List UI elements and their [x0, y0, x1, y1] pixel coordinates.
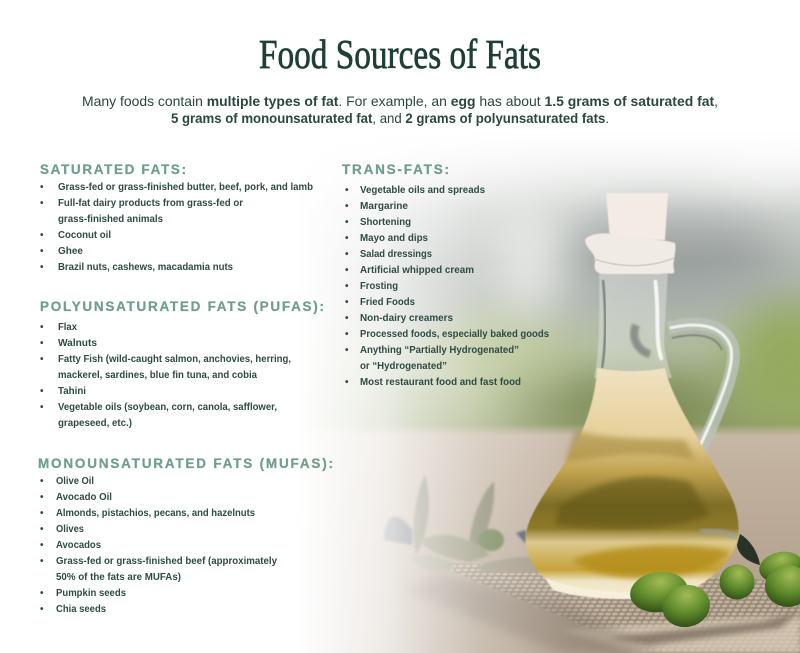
panel: saturated fats [40, 162, 313, 273]
olive sprig [384, 475, 540, 572]
intro text [82, 93, 718, 126]
list: trans-fats: • [345, 249, 349, 260]
dark leaf behind bottle [737, 534, 760, 565]
list: polyunsaturated fats: grapeseed, etc.) [58, 418, 132, 429]
list: trans-fats [345, 185, 549, 388]
cork [606, 193, 668, 240]
list: polyunsaturated fats: • [40, 354, 44, 365]
glass neck [594, 270, 672, 378]
list: monounsaturated fats: Pumpkin seeds [56, 588, 126, 599]
list: trans-fats: • [345, 377, 349, 388]
heading: polyunsaturated fats: POLYUNSATURATED FATS (PUFAS): [40, 299, 324, 314]
refraction and glints in oil [555, 477, 710, 529]
list: monounsaturated fats: • [40, 508, 44, 519]
list: saturated fats: • [40, 198, 44, 209]
list: trans-fats: • [345, 185, 349, 196]
list: monounsaturated fats: • [40, 604, 44, 615]
list: trans-fats: or “Hydrogenated” [360, 361, 447, 372]
list: saturated fats: • [40, 246, 44, 257]
panel: monounsaturated fats [38, 456, 333, 615]
list: trans-fats: Shortening [360, 217, 411, 228]
list: trans-fats: Margarine [360, 201, 408, 212]
heading: saturated fats: SATURATED FATS: [40, 162, 186, 177]
list: monounsaturated fats [40, 476, 277, 615]
list: saturated fats: Ghee [58, 246, 83, 257]
list: monounsaturated fats: • [40, 524, 44, 535]
list: saturated fats: Coconut oil [58, 230, 111, 241]
bottle rim [585, 233, 675, 274]
list: trans-fats: • [345, 233, 349, 244]
list: polyunsaturated fats: • [40, 322, 44, 333]
list: trans-fats: Most restaurant food and fast food [360, 377, 521, 388]
list: monounsaturated fats: Olives [56, 524, 84, 535]
list: saturated fats [40, 182, 313, 273]
list: polyunsaturated fats: Flax [58, 322, 77, 333]
list: monounsaturated fats: Grass-fed or grass-finished beef (approximately [56, 556, 277, 567]
icon: green olives [627, 548, 800, 631]
list: monounsaturated fats: Olive Oil [56, 476, 94, 487]
list: trans-fats: • [345, 265, 349, 276]
list: trans-fats: • [345, 313, 349, 324]
list: monounsaturated fats: 50% of the fats are MUFAs) [56, 572, 181, 583]
list: trans-fats: • [345, 217, 349, 228]
list: monounsaturated fats: • [40, 492, 44, 503]
list: saturated fats: • [40, 262, 44, 273]
list: monounsaturated fats: • [40, 540, 44, 551]
list: monounsaturated fats: Almonds, pistachios, pecans, and hazelnuts [56, 508, 255, 519]
list: saturated fats: • [40, 230, 44, 241]
list: trans-fats: • [345, 345, 349, 356]
list: saturated fats: Full-fat dairy products from grass-fed or [58, 198, 243, 209]
oil body [526, 368, 739, 597]
list: trans-fats: • [345, 281, 349, 292]
list: saturated fats: Brazil nuts, cashews, macadamia nuts [58, 262, 233, 273]
background photo: blurred garden and wooden table [320, 155, 800, 653]
list: trans-fats: • [345, 201, 349, 212]
list: saturated fats: Grass-fed or grass-finished butter, beef, pork, and lamb [58, 182, 313, 193]
list: trans-fats: • [345, 297, 349, 308]
list: saturated fats: grass-finished animals [58, 214, 163, 225]
list: monounsaturated fats: Chia seeds [56, 604, 106, 615]
list: polyunsaturated fats: • [40, 402, 44, 413]
list: polyunsaturated fats: mackerel, sardines, blue fin tuna, and cobia [58, 370, 257, 381]
list: trans-fats: Processed foods, especially baked goods [360, 329, 549, 340]
list: monounsaturated fats: • [40, 476, 44, 487]
list: trans-fats: Fried Foods [360, 297, 415, 308]
list: monounsaturated fats: Avocados [56, 540, 101, 551]
list: trans-fats: Anything “Partially Hydrogenated” [360, 345, 519, 356]
heading: trans-fats: TRANS-FATS: [342, 162, 449, 177]
intro text: Many foods contain multiple types of fat. For example, an egg has about 1.5 grams of saturated fat, [82, 93, 718, 109]
intro text: 5 grams of monounsaturated fat, and 2 grams of polyunsaturated fats. [171, 110, 609, 126]
list: polyunsaturated fats: Tahini [58, 386, 86, 397]
list: monounsaturated fats: Avocado Oil [56, 492, 112, 503]
list: polyunsaturated fats: • [40, 386, 44, 397]
heading: monounsaturated fats: MONOUNSATURATED FATS (MUFAS): [38, 456, 333, 471]
list: trans-fats: • [345, 329, 349, 340]
title: Food Sources of Fats [259, 31, 541, 77]
panel: polyunsaturated fats [40, 299, 324, 429]
list: polyunsaturated fats: • [40, 338, 44, 349]
list: trans-fats: Mayo and dips [360, 233, 428, 244]
panel: trans-fats [342, 162, 549, 388]
list: trans-fats: Frosting [360, 281, 398, 292]
bottle handle [668, 324, 734, 452]
list: polyunsaturated fats: Fatty Fish (wild-caught salmon, anchovies, herring, [58, 354, 291, 365]
list: trans-fats: Artificial whipped cream [360, 265, 474, 276]
list: trans-fats: Non-dairy creamers [360, 313, 453, 324]
list: monounsaturated fats: • [40, 556, 44, 567]
list: polyunsaturated fats: Walnuts [58, 338, 97, 349]
list: monounsaturated fats: • [40, 588, 44, 599]
list: polyunsaturated fats: Vegetable oils (soybean, corn, canola, safflower, [58, 402, 277, 413]
list: trans-fats: Salad dressings [360, 249, 432, 260]
list: polyunsaturated fats [40, 322, 291, 429]
icon: olive oil bottle [526, 193, 760, 599]
list: saturated fats: • [40, 182, 44, 193]
list: trans-fats: Vegetable oils and spreads [360, 185, 485, 196]
